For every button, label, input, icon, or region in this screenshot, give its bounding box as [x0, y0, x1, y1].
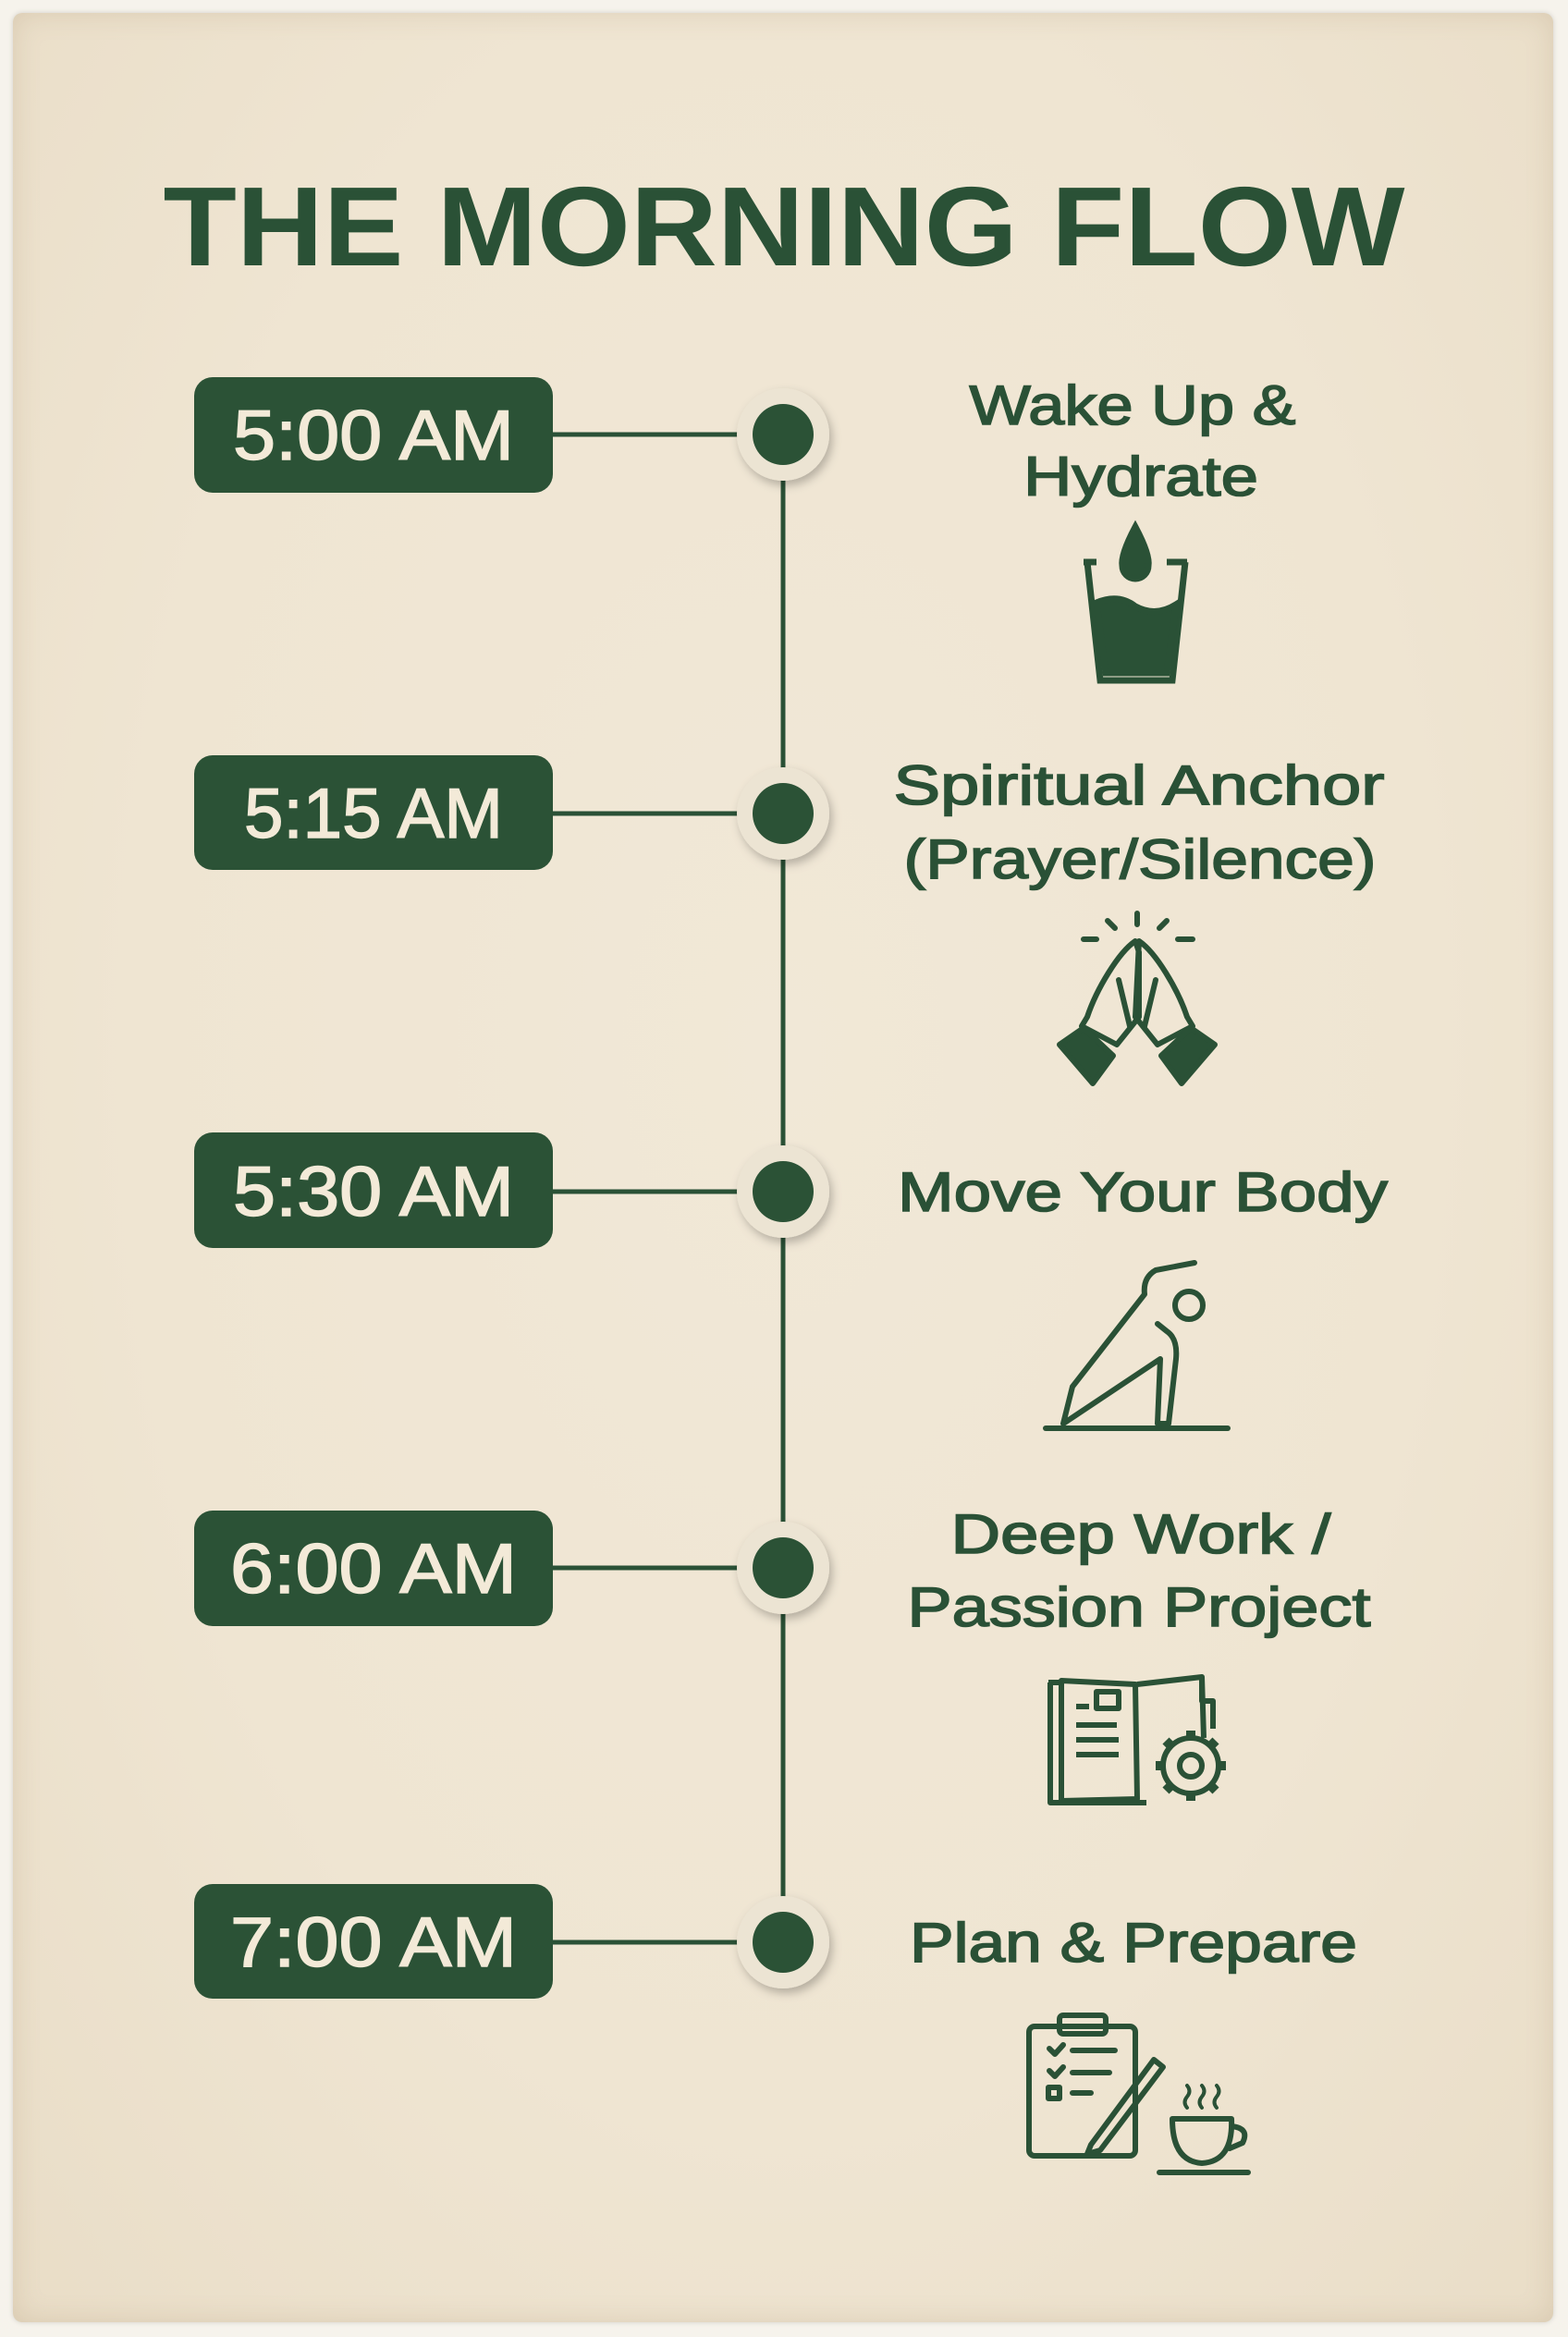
step 4: 6:00 AM: Deep Work /: [950, 1503, 1331, 1565]
step 5: 7:00 AM: 7:00 AM: [230, 1903, 517, 1982]
step 2: 5:15 AM: 5:15 AM: [244, 775, 503, 853]
step 5: 7:00 AM: Plan & Prepare: [910, 1912, 1357, 1974]
step 1: 5:00 AM: Wake Up &: [969, 374, 1296, 436]
step 5: 7:00 AM: [194, 1884, 1357, 1999]
step 4: 6:00 AM: Passion Project: [908, 1576, 1371, 1638]
icon: stretching figure: [1046, 1263, 1228, 1428]
step 4: 6:00 AM: [194, 1503, 1371, 1638]
step 2: 5:15 AM: (Prayer/Silence): [904, 828, 1376, 890]
step 3: 5:30 AM: [194, 1132, 1388, 1248]
step 1: 5:00 AM: [194, 374, 1296, 508]
step 2: 5:15 AM: [194, 754, 1385, 890]
icon: water glass: [1084, 527, 1187, 680]
step 4: 6:00 AM: 6:00 AM: [230, 1530, 517, 1609]
icon: praying hands: [1060, 913, 1215, 1083]
icon: clipboard and coffee: [1029, 2015, 1248, 2172]
step 3: 5:30 AM: Move Your Body: [898, 1161, 1388, 1223]
step 1: 5:00 AM: 5:00 AM: [233, 397, 514, 475]
step 3: 5:30 AM: 5:30 AM: [233, 1153, 514, 1231]
timeline vertical line: [780, 434, 786, 1942]
step 2: 5:15 AM: Spiritual Anchor: [893, 754, 1385, 816]
step 1: 5:00 AM: Hydrate: [1023, 446, 1258, 508]
title: THE MORNING FLOW: [163, 164, 1405, 289]
icon: book with gear: [1048, 1677, 1226, 1803]
